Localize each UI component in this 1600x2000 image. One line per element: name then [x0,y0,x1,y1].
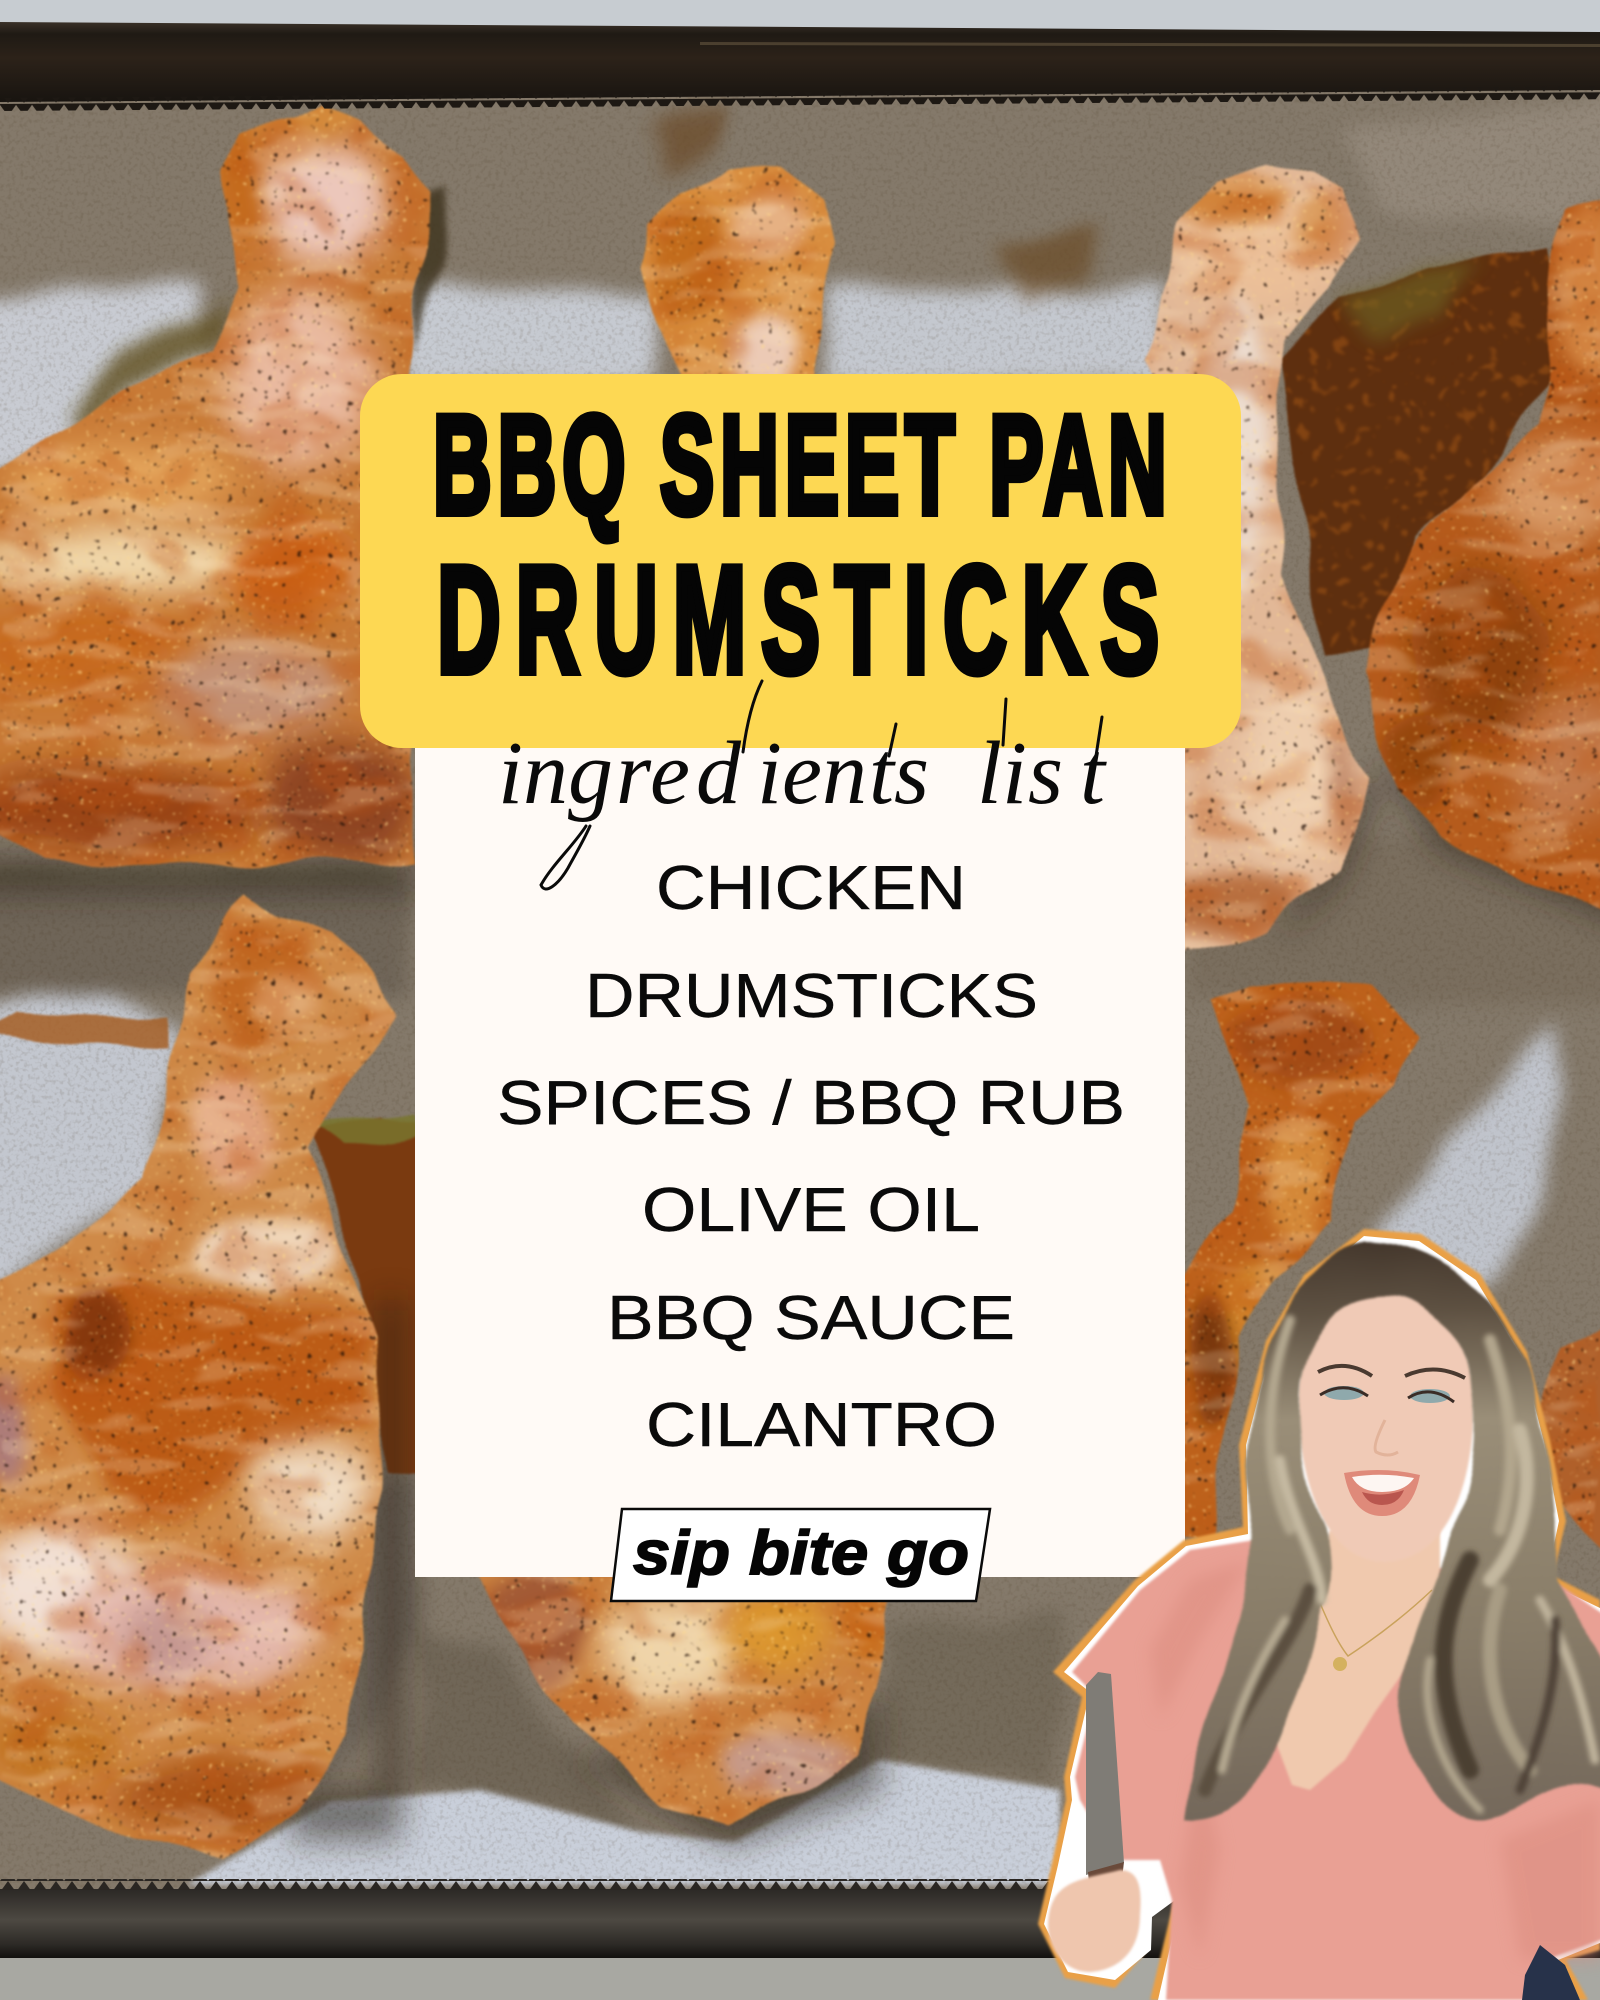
face [1298,1292,1474,1562]
drumstick: far right [1350,180,1600,920]
jeans [1522,1945,1580,2000]
script subheading [498,681,1107,889]
ingredient: chicken: CHICKEN [656,854,966,923]
hair [1186,1240,1600,1823]
facial features [1318,1366,1465,1516]
drumstick: far right behind presenter [1530,1300,1600,1600]
white inner outline [1044,1236,1600,2000]
sheet pan: top rim [0,22,1600,111]
presenter cut-out [1038,1229,1600,2000]
sheet pan: bottom rim [0,1879,1600,1958]
drumstick: lower right behind presenter [1185,980,1420,1538]
script subheading: ingredients list [498,724,1107,823]
drumstick: top centre knob [640,164,836,374]
ingredient: spices / bbq rub: SPICES / BBQ RUB [497,1069,1125,1138]
ingredient: olive oil: OLIVE OIL [642,1176,980,1245]
logo: sip bite go: sip bite go [633,1519,969,1588]
blouse [1072,1540,1600,2000]
oil and sauce pools on parchment [0,112,1580,1470]
drumstick: bottom left [0,880,400,1870]
hand holding knife [1048,1672,1141,1972]
title line 1: BBQ SHEET PAN [433,387,1167,544]
ingredients panel [415,748,1185,1577]
sticker outline [1038,1229,1600,2000]
drumstick: top right centre [1140,160,1380,960]
nose [1375,1420,1398,1455]
blouse shading [1150,1560,1600,1960]
title line 2: DRUMSTICKS [437,536,1159,705]
title banner [360,374,1241,748]
mouth [1344,1470,1420,1516]
drop shadows under chicken [0,760,1600,1846]
brows [1318,1366,1372,1376]
ingredient: cilantro: CILANTRO [646,1391,997,1460]
drumstick: bottom centre [478,1577,888,1826]
pendant [1333,1657,1347,1671]
chest and neck [1268,1530,1440,1790]
eyes [1324,1386,1364,1400]
script flourishes [541,681,1102,889]
logo: sip bite go [611,1509,990,1601]
ingredient: bbq sauce: BBQ SAUCE [607,1284,1015,1353]
hair strands [1205,1320,1595,1810]
drumstick: top left [0,105,432,870]
necklace [1318,1590,1432,1656]
ingredient: drumsticks: DRUMSTICKS [585,962,1038,1031]
